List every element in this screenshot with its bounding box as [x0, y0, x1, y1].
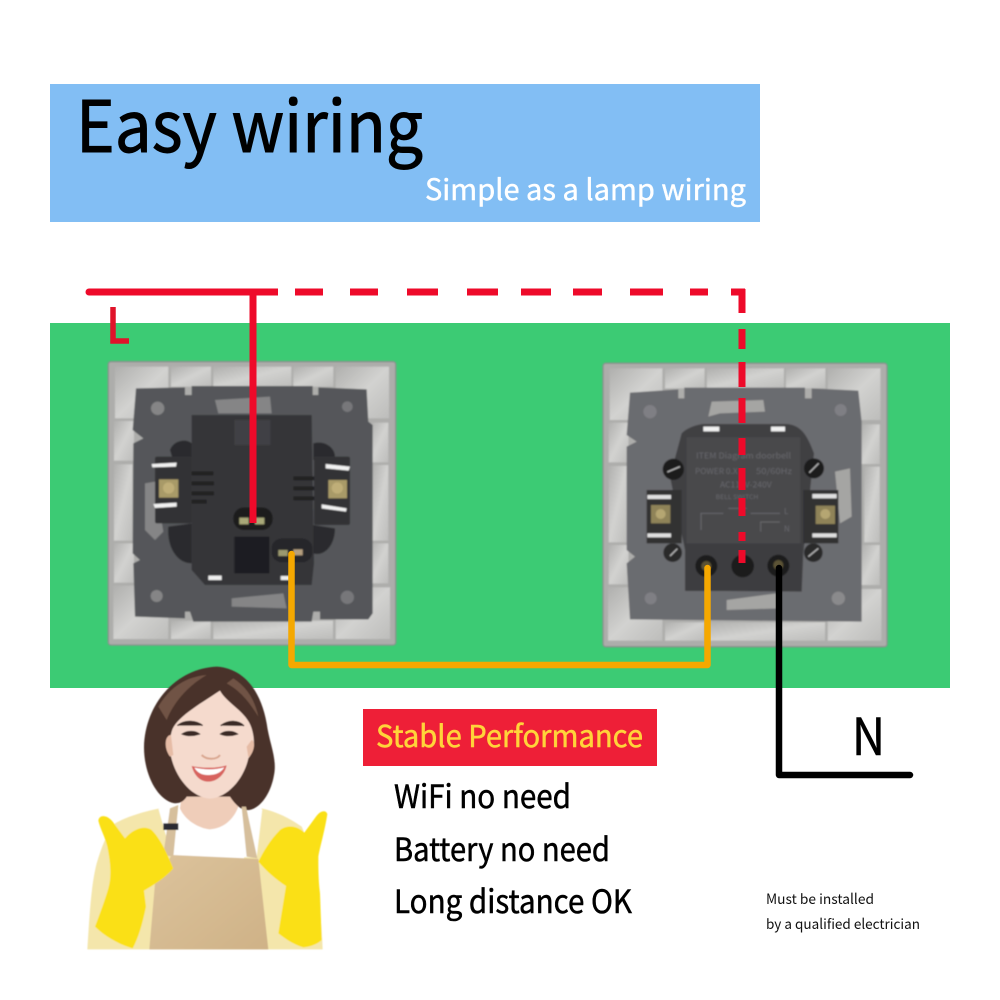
red live wire solid [89, 292, 278, 523]
strap buckle [163, 823, 178, 830]
nose shadow [202, 755, 220, 759]
red wire dashed switched run [295, 289, 745, 563]
apron [149, 855, 268, 949]
product label printed text [695, 450, 792, 534]
product label printed text: 50/60Hz [756, 466, 792, 477]
lower contact socket [272, 538, 312, 562]
product label printed text: AC110V-240V [720, 479, 772, 490]
ears [166, 735, 254, 757]
red wire start cap [86, 288, 92, 296]
neck [180, 783, 238, 829]
feature list [394, 772, 632, 923]
eyebrows and eyes [177, 721, 244, 735]
hair highlight [158, 675, 258, 720]
wire holes [695, 555, 789, 577]
upper contact socket [233, 507, 273, 530]
white shirt [158, 808, 262, 857]
header banner [50, 71, 760, 222]
white clips [208, 576, 290, 580]
circuit diagram [701, 508, 780, 532]
switch rear housing [670, 424, 814, 592]
left terminal block [152, 457, 214, 523]
hair [144, 667, 275, 810]
teeth [194, 767, 224, 775]
feature: wifi: WiFi no need [394, 772, 571, 818]
face [170, 691, 254, 799]
apron straps [163, 805, 257, 858]
note line one: Must be installed [766, 889, 874, 909]
adjusting screws [663, 458, 824, 562]
banner background [50, 84, 760, 222]
switch frame [603, 363, 887, 647]
product label printed text: ITEM Diagram doorbell [696, 450, 791, 461]
mounting slots [643, 400, 852, 610]
switch mounting plate [627, 388, 862, 622]
black neutral wire [779, 568, 910, 775]
socket mounting plate [133, 386, 373, 622]
green wiring panel [50, 323, 950, 688]
socket rear view [108, 362, 396, 645]
mouth [192, 765, 227, 782]
white clips [703, 427, 785, 431]
note line two: by a qualified electrician [766, 914, 920, 934]
product label printed text: POWER 0.X [695, 466, 738, 477]
product label printed text: N [784, 523, 790, 534]
feature: battery: Battery no need [394, 825, 610, 871]
L label [113, 307, 129, 341]
stable performance badge [363, 709, 657, 766]
title: Easy wiring [76, 71, 423, 173]
installation note [766, 889, 920, 934]
woman giving thumbs up [87, 667, 327, 949]
subtitle: Simple as a lamp wiring [425, 167, 746, 209]
feature: distance: Long distance OK [394, 877, 632, 923]
left terminal [647, 490, 682, 543]
left glove [95, 816, 173, 948]
badge label: Stable Performance [376, 712, 643, 756]
N label: N [852, 696, 885, 770]
right terminal [803, 490, 838, 543]
cardigan [87, 808, 323, 949]
mounting slots [145, 397, 354, 608]
right glove [258, 811, 327, 947]
product label printed text: L [784, 506, 789, 517]
orange connecting wire [292, 554, 708, 665]
right terminal block [293, 457, 350, 525]
switch rear view [603, 363, 887, 647]
socket frame [108, 362, 396, 645]
badge background [363, 709, 657, 766]
socket rear housing [192, 415, 314, 585]
product label printed text: BELL SWITCH [716, 492, 758, 501]
